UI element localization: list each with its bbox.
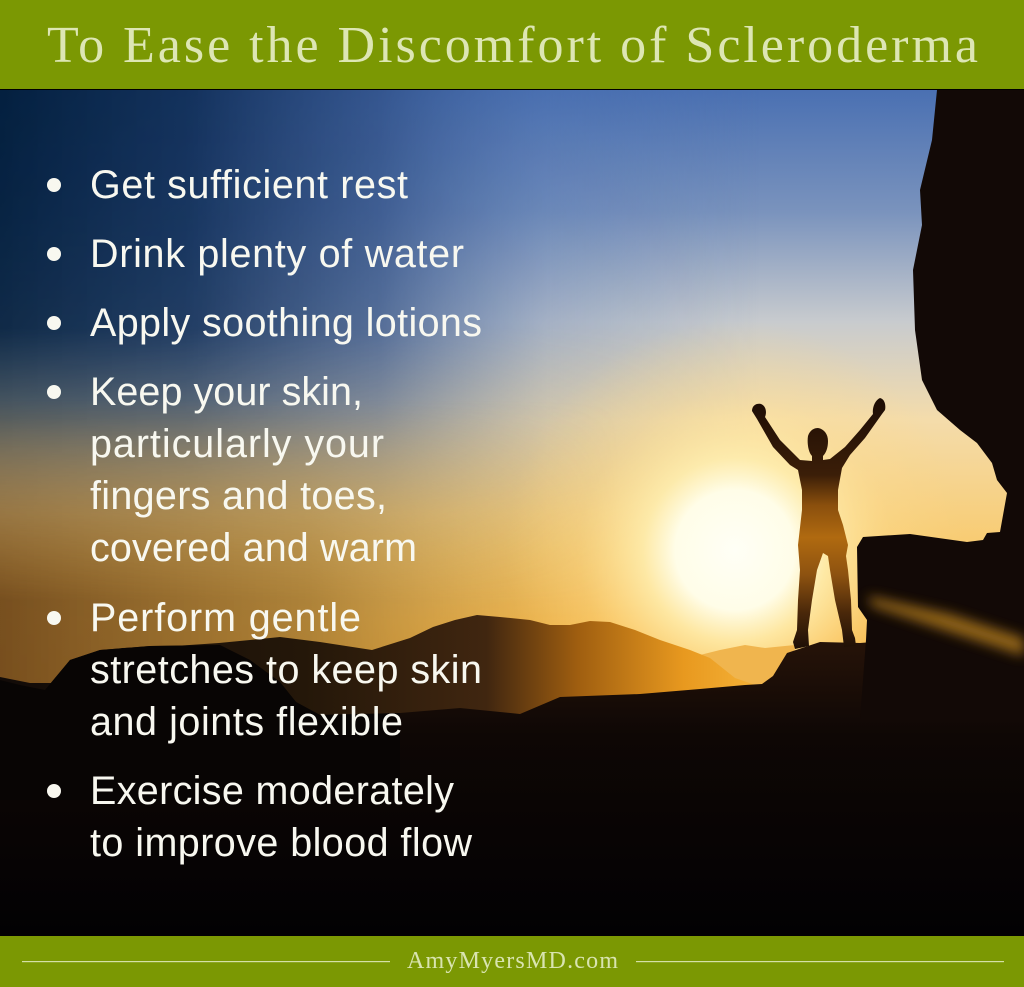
sunlight flare across rock (868, 596, 1024, 656)
bullet: stretches: and joints flexible (90, 700, 403, 744)
bullet: warm (47, 370, 417, 570)
rock cliff silhouette (857, 90, 1024, 720)
bullet: warm: covered and warm (90, 526, 417, 570)
bullet: warm: Keep your skin, (90, 370, 363, 414)
bullet: exercise (47, 769, 472, 865)
bullet: stretches: Perform gentle (90, 596, 361, 640)
bullet: water: Drink plenty of water (90, 232, 464, 276)
bullet list (47, 163, 482, 865)
bullet: exercise: to improve blood flow (90, 821, 472, 865)
website: AmyMyersMD.com (407, 948, 618, 974)
bullet: warm: fingers and toes, (90, 474, 387, 518)
title bar (0, 0, 1024, 89)
photo background: sunset sky (0, 90, 1007, 683)
bullet: stretches: stretches to keep skin (90, 648, 482, 692)
footer bar (0, 936, 1024, 987)
figure with raised arms (752, 398, 885, 649)
bullet: exercise: Exercise moderately (90, 769, 454, 813)
bullet: warm: particularly your (90, 422, 384, 466)
bullet: lotions: Apply soothing lotions (90, 301, 482, 345)
bullet: rest: Get sufficient rest (90, 163, 408, 207)
left dark hill (0, 645, 400, 800)
title: To Ease the Discomfort of Scleroderma (47, 17, 978, 74)
bullet: stretches (47, 596, 482, 744)
distant mountains and foreground ridge (0, 615, 1024, 936)
